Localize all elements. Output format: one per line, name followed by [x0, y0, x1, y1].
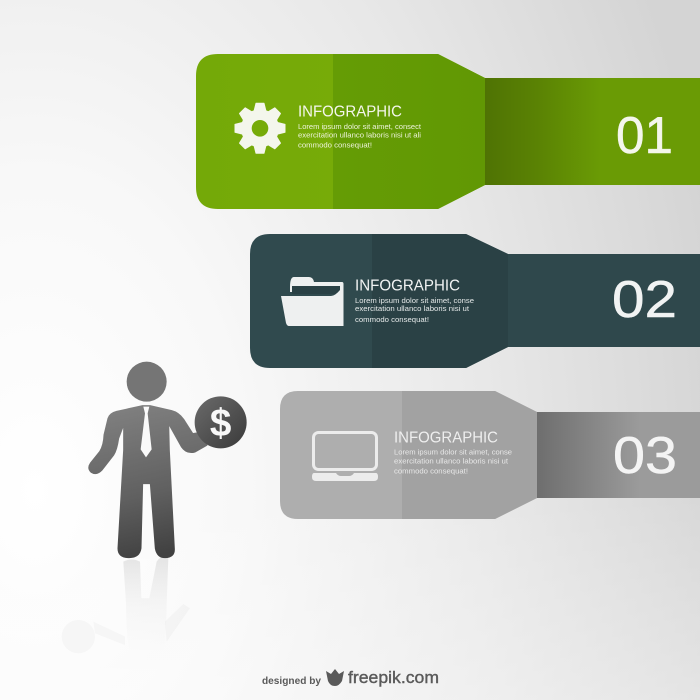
heading: 01: INFOGRAPHIC	[298, 104, 402, 120]
band: 03	[537, 412, 700, 498]
text block: 01: commodo consequat!	[298, 140, 372, 150]
tag body: 01	[196, 54, 485, 209]
tag body: 02	[250, 234, 508, 368]
number: 03: 03	[613, 427, 677, 485]
icon: folder	[281, 277, 344, 326]
text block: 01: exercitation ullanco laboris nisi ut ali	[298, 130, 421, 140]
icon: gear	[235, 103, 285, 153]
credit text: designed by	[262, 675, 321, 687]
body	[89, 406, 207, 557]
band: 01	[485, 78, 700, 185]
text block: 02: exercitation ullanco laboris nisi ut	[355, 304, 469, 313]
tag shaded half: 01	[333, 54, 485, 209]
panel: step 01 green	[196, 54, 700, 209]
head	[127, 362, 167, 402]
icon: laptop	[312, 432, 378, 481]
tag body: 03	[280, 391, 537, 519]
number: 01: 01	[616, 107, 673, 165]
text block: 03: Lorem ipsum dolor sit aimet, conse	[394, 448, 512, 456]
icon: dollar coin	[195, 396, 247, 448]
brand text: freepik.com	[348, 668, 439, 687]
heading: 03: INFOGRAPHIC	[394, 430, 498, 446]
text block: 03: exercitation ullanco laboris nisi ut	[394, 456, 508, 466]
footer: freepik credit	[262, 668, 439, 687]
reflection of businessman	[62, 557, 190, 653]
heading: 02: INFOGRAPHIC	[355, 278, 460, 294]
tag shaded half: 03	[402, 391, 537, 519]
tag shaded half: 02	[372, 234, 508, 368]
panel: step 02 dark teal	[250, 234, 700, 368]
text block: 01: Lorem ipsum dolor sit aimet, consect	[298, 122, 421, 131]
text block: 02: commodo consequat!	[355, 315, 429, 324]
number: 02: 02	[612, 271, 677, 329]
text block: 02: Lorem ipsum dolor sit aimet, conse	[355, 296, 474, 305]
businessman figure	[89, 362, 247, 557]
band: 02	[508, 254, 700, 347]
icon: freepik logo	[326, 669, 344, 686]
icon: dollar coin: $	[210, 402, 231, 445]
panel: step 03 grey	[280, 391, 700, 519]
text block: 03: commodo consequat!	[394, 466, 468, 476]
tie	[141, 407, 152, 457]
